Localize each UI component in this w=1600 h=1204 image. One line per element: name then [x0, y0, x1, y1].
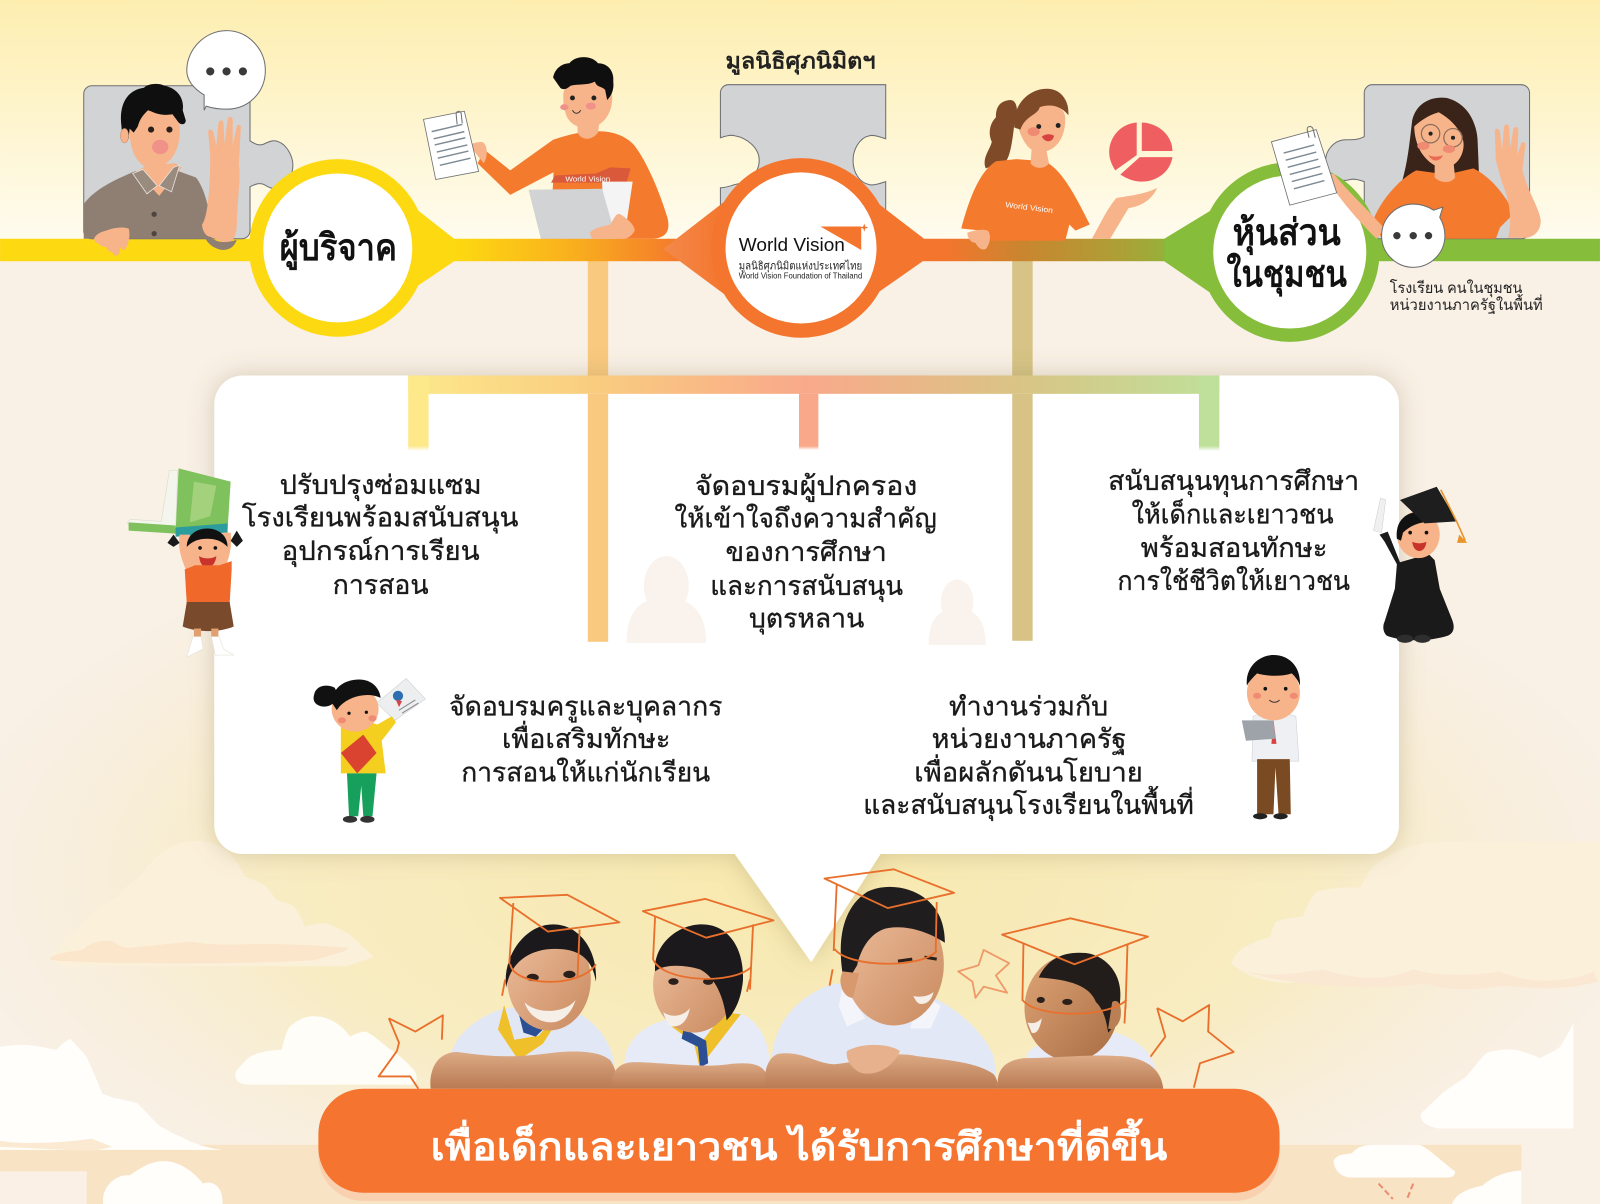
circle node: World Vision foundation: [663, 158, 939, 338]
puzzle piece: community: [1325, 85, 1530, 239]
logo: World Vision: [739, 223, 868, 281]
puzzle piece: donor: [84, 86, 293, 239]
character: staff man with documents: World Vision: [565, 176, 610, 184]
character: community woman: [1325, 98, 1541, 239]
student 3: [765, 887, 998, 1089]
student 4: [998, 953, 1163, 1090]
text block: teacher training: [449, 691, 722, 788]
text block: government work: ทำงานร่วมกับ: [949, 691, 1108, 721]
banner: goal: [318, 1089, 1280, 1201]
text block: scholarships: ให้เด็กและเยาวชน: [1132, 497, 1334, 529]
circle node: community partners: หุ้นส่วน: [1233, 212, 1341, 256]
text block: scholarships: สนับสนุนทุนการศึกษา: [1108, 466, 1359, 497]
text block: community partner note: [1390, 279, 1543, 314]
icon: document held by staff: [423, 111, 479, 180]
text block: teacher training: จัดอบรมครูและบุคลากร: [449, 691, 722, 722]
text block: parent training: บุตรหลาน: [749, 604, 864, 635]
student 2: [612, 924, 770, 1089]
text block: school repair: อุปกรณ์การเรียน: [282, 536, 480, 567]
logo: World Vision: มูลนิธิศุภนิมิตแห่งประเทศไทย: [739, 259, 862, 272]
character: girl graduate: [1373, 487, 1467, 643]
text block: community partner note: หน่วยงานภาครัฐในพื้นที่: [1390, 294, 1543, 314]
text block: school repair: [242, 470, 518, 600]
icon: document held by woman: [1271, 127, 1337, 205]
band: process line: [0, 239, 1600, 261]
photo: four students: [430, 887, 1163, 1090]
graduation caps: outlined: [500, 869, 1148, 1023]
text block: government work: [863, 691, 1194, 821]
character: staff man with documents: [469, 57, 668, 239]
circle node: donor: [249, 159, 454, 337]
speech bubble: donor: [187, 31, 265, 110]
logo: World Vision: World Vision Foundation of Thailand: [739, 272, 863, 281]
text block: government work: เพื่อผลักดันนโยบาย: [914, 755, 1143, 788]
text block: school repair: การสอน: [333, 570, 429, 600]
heading: foundation: มูลนิธิศุภนิมิตฯ: [726, 48, 876, 75]
character: teacher with certificate: [314, 679, 426, 823]
tree connector tubes from the band: [588, 255, 1033, 388]
circle node: community partners: ในชุมชน: [1227, 253, 1347, 298]
text block: school repair: ปรับปรุงซ่อมแซม: [280, 470, 482, 501]
text block: school repair: โรงเรียนพร้อมสนับสนุน: [242, 502, 518, 533]
icon: pie chart: [1109, 122, 1172, 182]
puzzle piece: foundation: [720, 85, 886, 224]
text block: parent training: [674, 471, 937, 635]
character: officer with tablet: [1242, 655, 1300, 819]
text block: parent training: จัดอบรมผู้ปกครอง: [695, 471, 917, 502]
text block: scholarships: การใช้ชีวิตให้เยาวชน: [1117, 566, 1350, 596]
text block: government work: และสนับสนุนโรงเรียนในพื้นที่: [863, 786, 1194, 821]
clouds and skyline backdrop: [0, 841, 1600, 1204]
text block: scholarships: พร้อมสอนทักษะ: [1141, 533, 1328, 563]
logo: World Vision: World Vision: [739, 234, 845, 255]
text block: parent training: และการสนับสนุน: [710, 571, 903, 602]
panel: white speech card: [214, 375, 1399, 962]
text block: government work: หน่วยงานภาครัฐ: [932, 724, 1127, 755]
character: girl lifting book: [128, 468, 243, 657]
banner: goal: เพื่อเด็กและเยาวชน ได้รับการศึกษาที่ดีขึ้น: [431, 1118, 1168, 1169]
connector tree bars: [408, 375, 1219, 642]
character: staff woman with chart: World Vision: [1005, 200, 1054, 215]
text block: scholarships: [1108, 466, 1359, 596]
character: donor man: [84, 84, 241, 256]
faint silhouettes: [627, 556, 986, 645]
speech bubble: community: [1382, 204, 1445, 267]
student 1: [430, 924, 616, 1089]
text block: parent training: ให้เข้าใจถึงความสำคัญ: [674, 504, 937, 534]
text block: teacher training: เพื่อเสริมทักษะ: [502, 721, 670, 754]
circle node: community partners: [1164, 162, 1380, 342]
text block: community partner note: โรงเรียน คนในชุมชน: [1390, 279, 1523, 298]
stars: outlined decorative: [379, 950, 1234, 1089]
text block: teacher training: การสอนให้แก่นักเรียน: [461, 758, 710, 788]
text block: parent training: ของการศึกษา: [726, 537, 887, 567]
circle node: donor: ผู้บริจาค: [280, 227, 397, 271]
character: staff woman with chart: [961, 89, 1157, 250]
